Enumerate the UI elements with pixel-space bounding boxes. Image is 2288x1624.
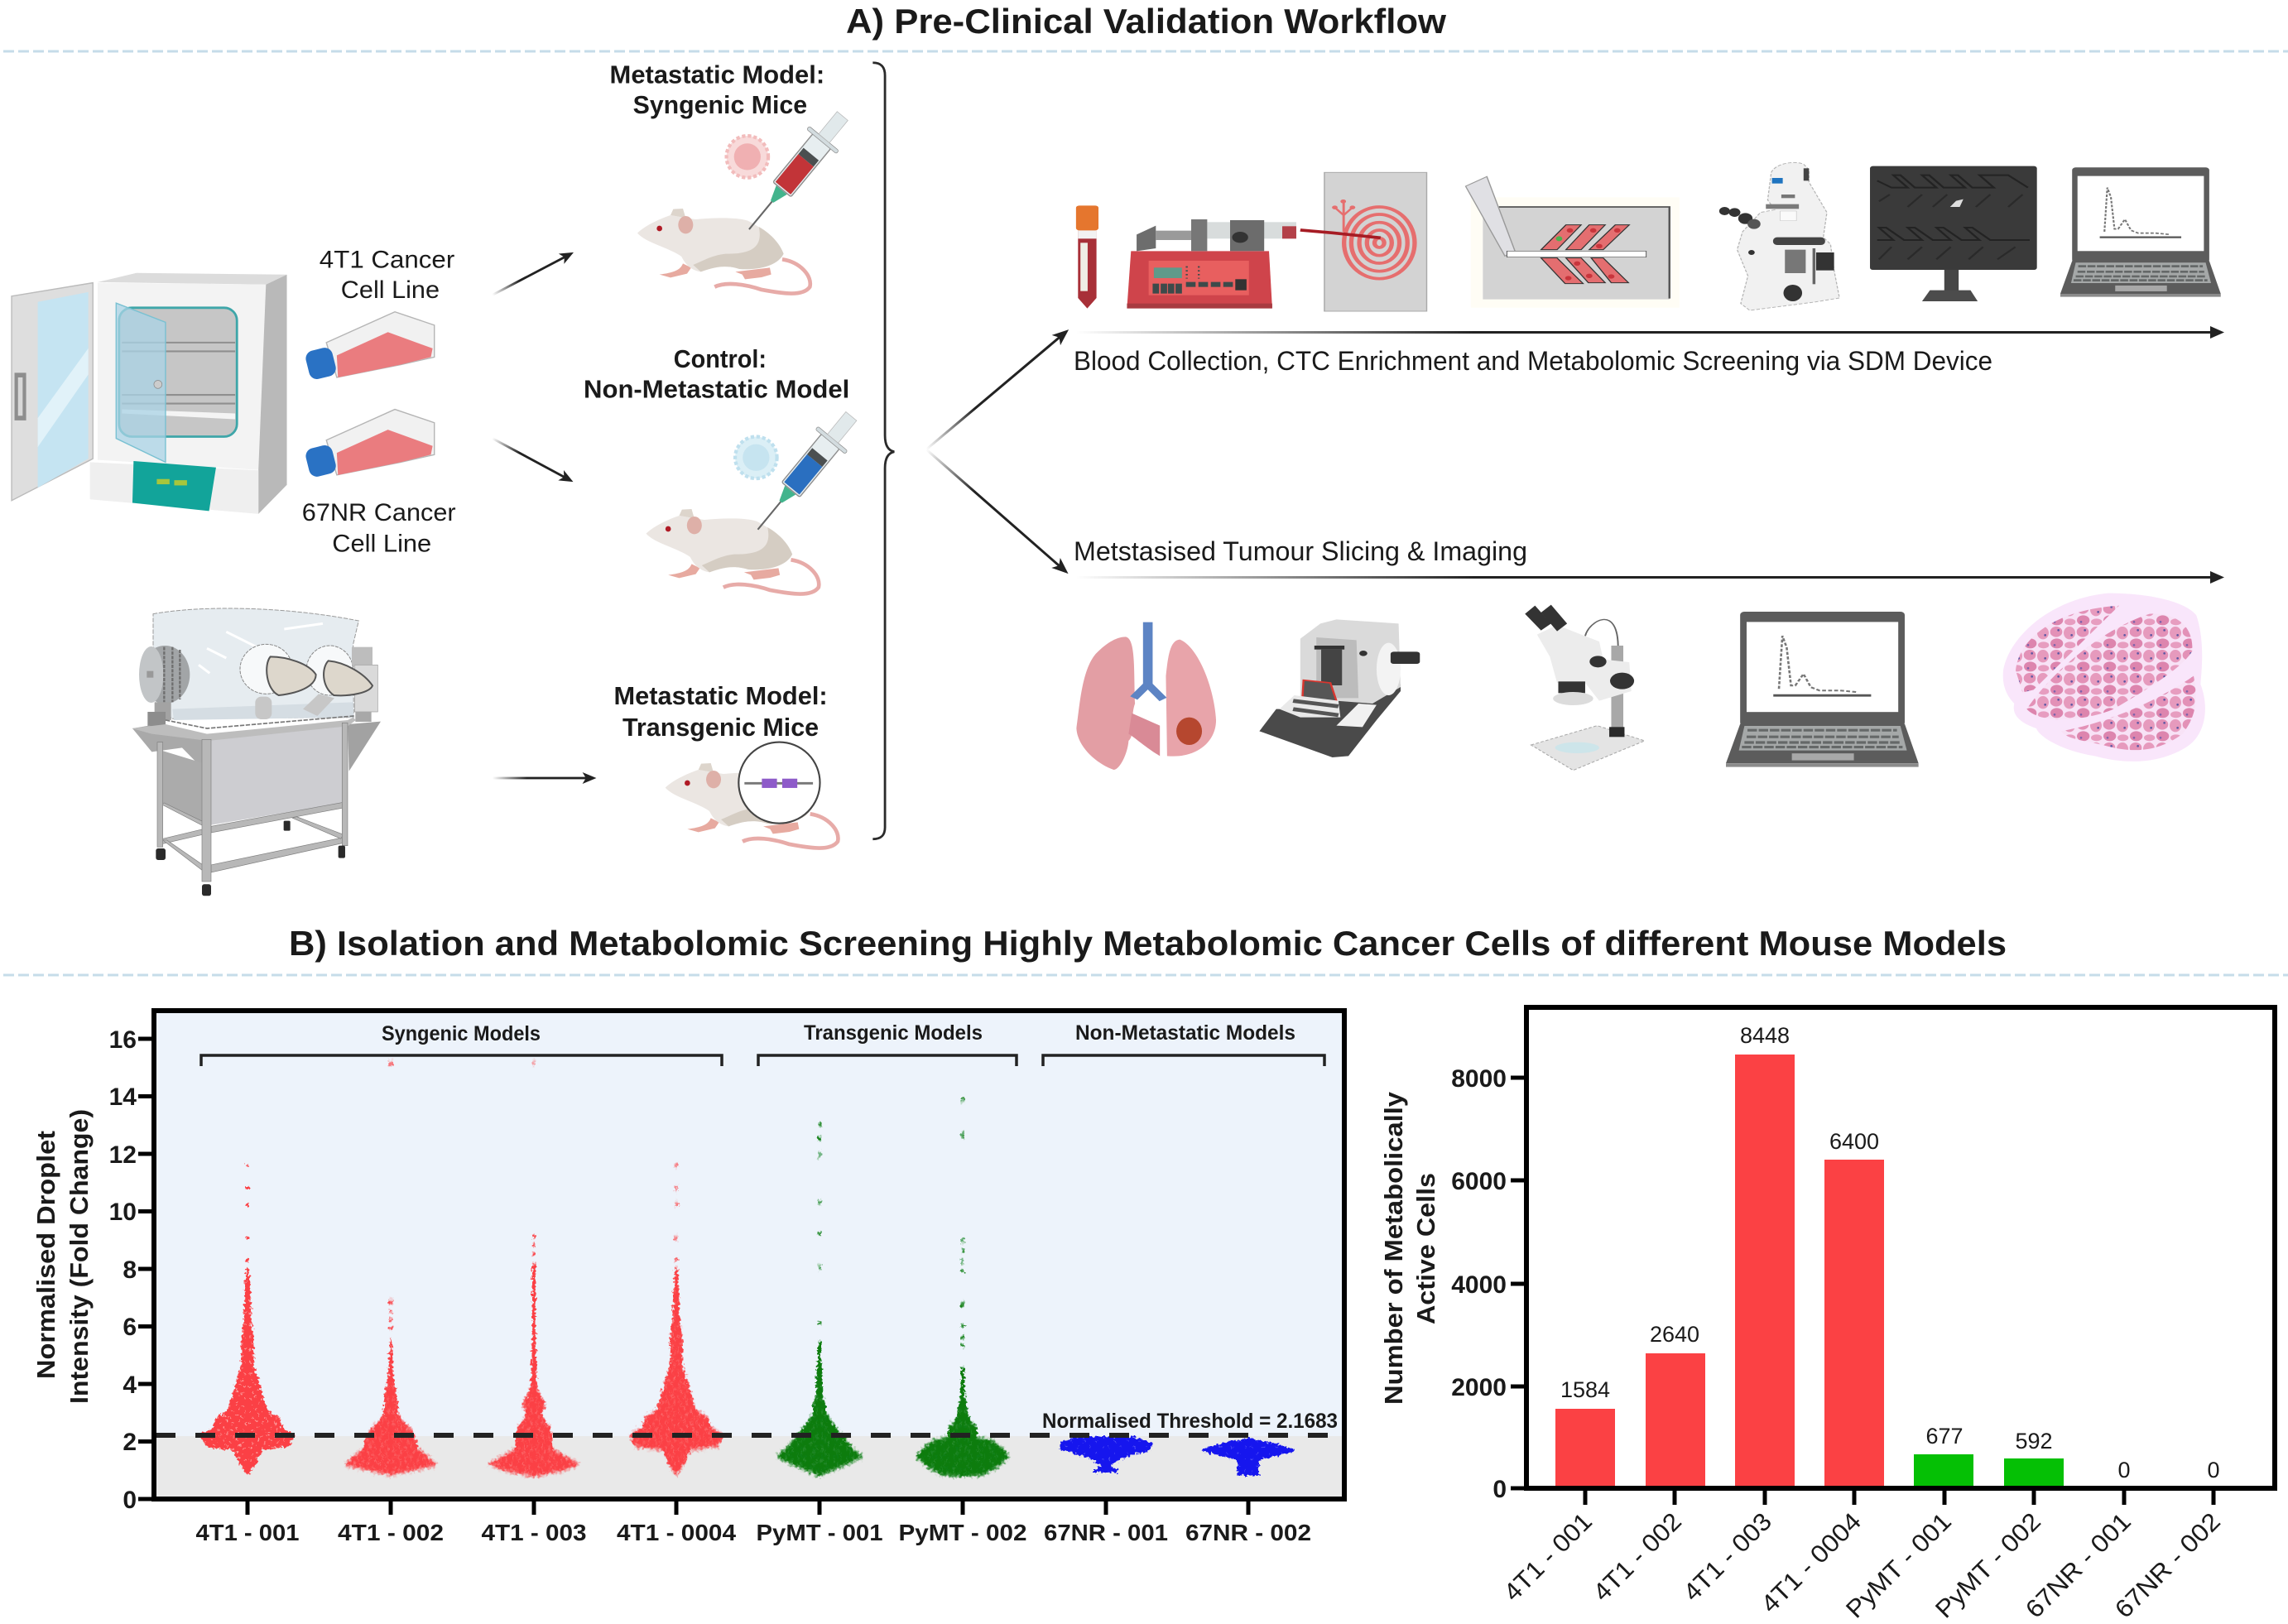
- label: Metastatic Model Transgenic Mice: Transgenic Mice: [622, 714, 819, 742]
- y axis title: Number of Metabolically: [1379, 1091, 1408, 1405]
- arrow: blood collection timeline: [1076, 326, 2224, 339]
- y axis title: [1379, 1091, 1440, 1405]
- chart frame: [1526, 1007, 2275, 1488]
- arrow: 4T1 flask to syngenic mice: [490, 247, 576, 300]
- swarm: 4T1 - 001: [200, 1164, 295, 1475]
- y axis ticks and labels: 4000: [1451, 1271, 1507, 1299]
- arrow: fan to blood workflow: [922, 324, 1073, 454]
- y axis title: Normalised Droplet: [31, 1131, 60, 1379]
- bar value labels: [1560, 1023, 2220, 1482]
- label: 4T1 Cancer Cell Line: Cell Line: [341, 276, 440, 304]
- bar value labels: 1584: [1560, 1377, 1610, 1402]
- y axis ticks and labels: 2: [123, 1429, 137, 1456]
- label: Metastatic Model Transgenic Mice: Metastatic Model:: [613, 683, 828, 710]
- x axis ticks and labels: 4T1 - 001: [1498, 1508, 1598, 1607]
- threshold dashed line: [156, 1433, 1329, 1438]
- icon: microtome: [1259, 619, 1420, 757]
- y axis ticks and labels: [109, 1026, 154, 1514]
- x axis ticks and labels: 67NR - 001: [1044, 1520, 1168, 1545]
- icon: glovebox isolator: [132, 608, 381, 896]
- panel: blood workflow equipment left: [1076, 172, 1680, 311]
- plot frame: [154, 1011, 1344, 1499]
- y axis ticks and labels: 6000: [1451, 1168, 1507, 1195]
- below threshold background: [154, 1436, 1344, 1499]
- label: Control Non-Metastatic Model: Control:: [674, 346, 767, 373]
- chart: normalised droplet intensity swarm plot: [31, 1009, 1344, 1545]
- icon: culture flask 67NR: [304, 410, 435, 478]
- group bracket labels: Non-Metastatic Models: [1075, 1021, 1295, 1045]
- x axis ticks and labels: 67NR - 002: [2110, 1508, 2226, 1624]
- icon: cell blue: [735, 437, 777, 478]
- swarm: 4T1 - 0004: [629, 1164, 723, 1475]
- x axis ticks and labels: 4T1 - 0004: [617, 1520, 736, 1545]
- label: 4T1 Cancer Cell Line: [320, 246, 454, 304]
- icon: syringe blue: [743, 404, 866, 541]
- y axis ticks and labels: 6: [123, 1314, 137, 1341]
- y axis title: Intensity (Fold Change): [65, 1109, 94, 1404]
- icon: stereo microscope: [1525, 605, 1645, 771]
- swarm: 67NR - 001: [1060, 1437, 1151, 1473]
- bar value labels: 0: [2117, 1458, 2131, 1482]
- y axis ticks and labels: 0: [123, 1487, 137, 1514]
- label: Metastatic Model Transgenic Mice: [613, 683, 828, 742]
- bar value labels: 2640: [1650, 1322, 1699, 1347]
- icon: culture flask 4T1: [304, 312, 435, 381]
- chart: number of metabolically active cells bar chart: [1379, 1007, 2275, 1624]
- label: Metastatic Model Syngenic Mice: Metastatic Model:: [610, 61, 824, 89]
- red tubing: [1300, 230, 1381, 238]
- icon: gene construct circle: [738, 742, 820, 824]
- swarm: PyMT - 001: [776, 1123, 863, 1477]
- x axis ticks and labels: PyMT - 001: [757, 1520, 882, 1545]
- icon: monitor with chip image: [1870, 166, 2037, 301]
- x axis ticks and labels: 67NR - 001: [2021, 1508, 2137, 1624]
- swarm points for all samples: [200, 1062, 1295, 1477]
- bracket grouping mouse models: [872, 63, 894, 839]
- group bracket labels: [201, 1021, 1324, 1066]
- icon: lungs with tumour: [1076, 622, 1216, 770]
- y axis ticks and labels: 8: [123, 1256, 137, 1284]
- x axis ticks and labels: 4T1 - 003: [482, 1520, 586, 1545]
- icon: spiral microfluidic chip: [1324, 172, 1427, 311]
- bar value labels: 0: [2207, 1458, 2220, 1482]
- icon: syringe pump: [1127, 219, 1296, 309]
- y axis ticks and labels: 4: [123, 1372, 137, 1399]
- arrow: glovebox to transgenic mice: [493, 772, 596, 784]
- group bracket labels: Syngenic Models: [382, 1022, 541, 1045]
- bar value labels: 592: [2015, 1429, 2053, 1453]
- y axis ticks and labels: [1451, 1065, 1526, 1503]
- label: Control Non-Metastatic Model: Non-Metastatic Model: [584, 377, 849, 404]
- y axis title: [31, 1109, 94, 1404]
- group bracket labels: Transgenic Models: [804, 1021, 983, 1045]
- label: Control Non-Metastatic Model: [584, 346, 849, 404]
- label: Metastatic Model Syngenic Mice: Syngenic Mice: [633, 92, 807, 119]
- icon: blood tube: [1076, 205, 1098, 309]
- bar value labels: 677: [1925, 1424, 1964, 1449]
- x axis ticks and labels: PyMT - 001: [1841, 1508, 1957, 1624]
- arrow: fan to tumour workflow: [922, 444, 1073, 579]
- plot area upper background: [154, 1009, 1344, 1437]
- icon: mouse syngenic: [637, 209, 810, 294]
- icon: laptop top: [2060, 167, 2221, 297]
- swarm: 67NR - 002: [1202, 1437, 1295, 1475]
- panel: tumour workflow equipment left: [1076, 605, 1645, 771]
- y axis ticks and labels: 16: [109, 1026, 137, 1054]
- label: blood collection workflow: Blood Collection, CTC Enrichment and Metabolomic Screening via SDM Device: [1074, 346, 1992, 376]
- label: Metastatic Model Syngenic Mice: [610, 61, 824, 119]
- x axis ticks and labels: PyMT - 002: [1930, 1508, 2046, 1624]
- label: tumour slicing workflow: Metstasised Tumour Slicing & Imaging: [1074, 536, 1527, 566]
- y axis ticks and labels: 8000: [1451, 1065, 1507, 1093]
- arrow: 67NR flask to control model: [490, 433, 576, 487]
- label: 4T1 Cancer Cell Line: 4T1 Cancer: [320, 246, 454, 273]
- icon: tumour cell pink: [727, 136, 768, 178]
- x axis ticks and labels: 4T1 - 002: [338, 1520, 444, 1545]
- swarm: PyMT - 002: [916, 1098, 1010, 1477]
- title: B) Isolation and Metabolomic Screening: B) Isolation and Metabolomic Screening Highly Metabolomic Cancer Cells of different Mouse Models: [289, 924, 2007, 963]
- y axis ticks and labels: 14: [109, 1083, 137, 1111]
- threshold label: Normalised Threshold = 2.1683: [1042, 1410, 1338, 1433]
- icon: laptop bottom: [1726, 612, 1919, 767]
- x axis ticks and labels: PyMT - 002: [899, 1520, 1026, 1545]
- x axis ticks and labels: 4T1 - 0004: [1756, 1508, 1867, 1618]
- icon: tissue section: [2003, 593, 2205, 762]
- bar value labels: 8448: [1740, 1023, 1790, 1048]
- icon: syringe red: [734, 103, 858, 242]
- label: 67NR Cancer Cell Line: 67NR Cancer: [302, 499, 456, 526]
- arrow: tumour slicing timeline: [1076, 571, 2224, 584]
- x axis ticks and labels: 4T1 - 003: [1678, 1508, 1777, 1607]
- x axis ticks and labels: 67NR - 002: [1185, 1520, 1311, 1545]
- y axis ticks and labels: 12: [109, 1141, 137, 1169]
- icon: incubator: [12, 273, 287, 514]
- x axis ticks and labels: [1498, 1488, 2226, 1624]
- y axis ticks and labels: 0: [1492, 1476, 1507, 1503]
- icon: mouse control: [646, 509, 819, 594]
- bars: [1555, 1055, 2064, 1488]
- icon: inverted microscope: [1719, 162, 1839, 310]
- x axis ticks and labels: [195, 1499, 1311, 1545]
- icon: droplet device: [1466, 176, 1680, 308]
- y axis ticks and labels: 10: [109, 1199, 137, 1226]
- swarm: 4T1 - 002: [344, 1062, 437, 1477]
- bar value labels: 6400: [1829, 1129, 1879, 1154]
- y axis ticks and labels: 2000: [1451, 1374, 1507, 1401]
- x axis ticks and labels: 4T1 - 001: [195, 1520, 300, 1545]
- icon: mouse transgenic: [666, 763, 838, 848]
- label: 67NR Cancer Cell Line: [302, 499, 456, 557]
- swarm: 4T1 - 003: [488, 1062, 580, 1477]
- y axis title: Active Cells: [1411, 1173, 1440, 1324]
- panel: model preparation: [12, 61, 894, 839]
- panel: blood workflow equipment right: [1719, 162, 2037, 310]
- x axis ticks and labels: 4T1 - 002: [1588, 1508, 1687, 1607]
- title: A) Pre-Clinical Validation Workflow: A) Pre-Clinical Validation Workflow: [846, 2, 1446, 41]
- label: 67NR Cancer Cell Line: Cell Line: [332, 530, 431, 557]
